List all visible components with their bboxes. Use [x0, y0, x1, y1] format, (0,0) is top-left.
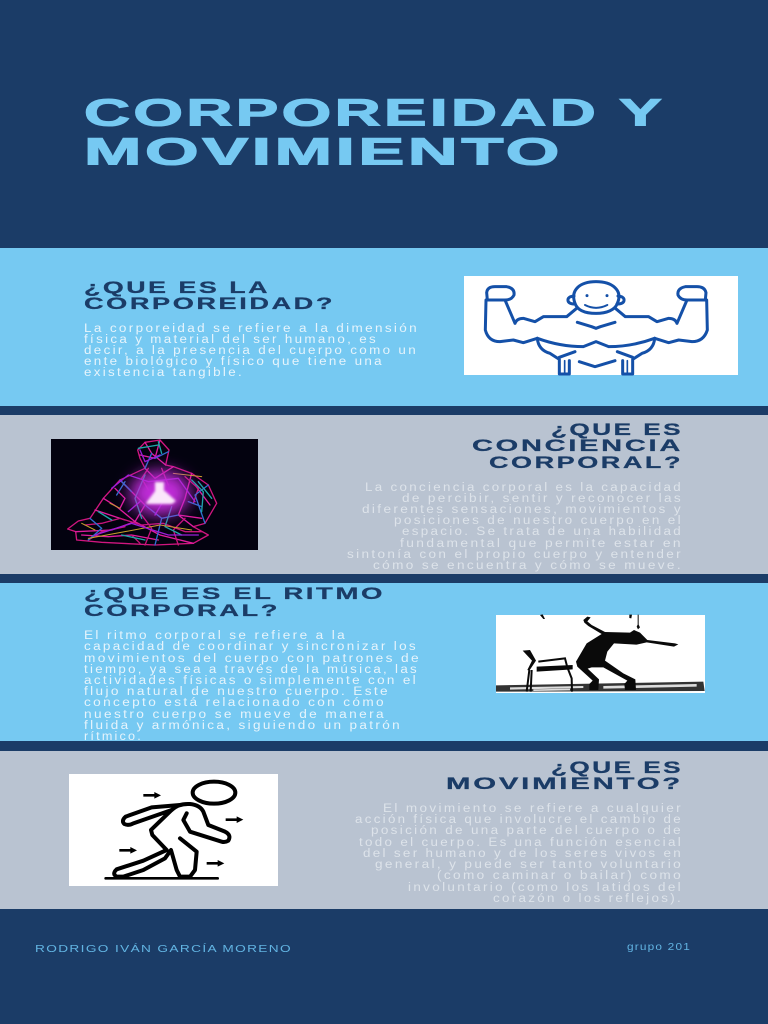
- text block: ritmo corporal: concepto está relacionado con cómo: [84, 697, 386, 709]
- text block: ritmo corporal: fluida y armónica, siguiendo un patrón: [84, 720, 402, 732]
- heading: movimiento: MOVIMIENTO?: [446, 774, 683, 793]
- text block: movimiento: general, y puede ser tanto voluntario: [375, 859, 683, 871]
- text block: movimiento: involuntario (como los latidos del: [408, 882, 683, 894]
- text block: corporeidad: [84, 323, 419, 379]
- text block: conciencia corporal: posiciones de nuestro cuerpo en el: [394, 515, 683, 527]
- text block: ritmo corporal: El ritmo corporal se refiere a la: [84, 630, 347, 642]
- text block: corporeidad: existencia tangible.: [84, 367, 244, 379]
- text block: conciencia corporal: sintonía con el propio cuerpo y entender: [347, 549, 683, 561]
- title: CORPOREIDAD Y: [84, 92, 665, 134]
- text block: ritmo corporal: capacidad de coordinar y sincronizar los: [84, 641, 418, 653]
- heading: ritmo corporal: CORPORAL?: [84, 601, 280, 620]
- heading: conciencia corporal: CORPORAL?: [489, 453, 683, 472]
- title: MOVIMIENTO: [84, 132, 563, 174]
- heading: ritmo corporal: [84, 584, 385, 620]
- title: [84, 92, 665, 174]
- text block: ritmo corporal: nuestro cuerpo se mueve de manera: [84, 709, 386, 721]
- image: meditating energy figure: [51, 439, 258, 550]
- icon: walking person with arrows: [69, 774, 278, 886]
- text block: corporeidad: La corporeidad se refiere a la dimensión: [84, 323, 419, 335]
- text block: movimiento: todo el cuerpo. Es una función esencial: [359, 837, 683, 849]
- text block: ritmo corporal: rítmico.: [84, 731, 143, 743]
- text block: ritmo corporal: tiempo, ya sea a través de la música, las: [84, 664, 419, 676]
- panel: que es el ritmo corporal: [0, 583, 768, 743]
- text block: movimiento: acción física que involucre el cambio de: [355, 814, 683, 826]
- footer: group: grupo 201: [627, 942, 691, 953]
- text block: conciencia corporal: [347, 482, 683, 572]
- text block: conciencia corporal: cómo se encuentra y cómo se mueve.: [373, 560, 683, 572]
- heading: corporeidad: CORPOREIDAD?: [84, 294, 335, 313]
- text block: movimiento: corazón o los reflejos).: [493, 893, 683, 905]
- image: dancer silhouette with chair: [496, 614, 705, 693]
- text block: conciencia corporal: La conciencia corporal es la capacidad: [365, 482, 683, 494]
- text block: conciencia corporal: fundamental que permite estar en: [400, 538, 683, 550]
- text block: ritmo corporal: actividades físicas o simplemente con el: [84, 675, 418, 687]
- text block: conciencia corporal: de percibir, sentir y reconocer las: [402, 493, 683, 505]
- panel: que es conciencia corporal: [0, 415, 768, 574]
- heading: conciencia corporal: CONCIENCIA: [472, 436, 683, 455]
- heading: ritmo corporal: ¿QUE ES EL RITMO: [84, 584, 385, 603]
- footer: author name: RODRIGO IVÁN GARCÍA MORENO: [35, 942, 292, 955]
- text block: movimiento: del ser humano y de los seres vivos en: [363, 848, 683, 860]
- heading: conciencia corporal: ¿QUE ES: [551, 420, 683, 439]
- heading: conciencia corporal: [472, 420, 683, 472]
- text block: movimiento: El movimiento se refiere a cualquier: [383, 803, 683, 815]
- text block: movimiento: (como caminar o bailar) como: [437, 870, 683, 882]
- panel: que es la corporeidad: [0, 248, 768, 406]
- heading: movimiento: ¿QUE ES: [551, 758, 683, 777]
- heading: movimiento: [446, 758, 683, 793]
- panel: que es movimiento: [0, 751, 768, 909]
- text block: conciencia corporal: diferentes sensaciones, movimientos y: [362, 504, 683, 516]
- text block: movimiento: [355, 803, 683, 905]
- text block: conciencia corporal: espacio. Se trata de una habilidad: [402, 526, 683, 538]
- text block: ritmo corporal: [84, 630, 421, 743]
- text block: corporeidad: física y material del ser humano, es: [84, 334, 378, 346]
- icon: muscular figure: [464, 276, 738, 375]
- text block: corporeidad: decir, a la presencia del cuerpo como un: [84, 345, 418, 357]
- heading: corporeidad: ¿QUE ES LA: [84, 278, 270, 297]
- text block: ritmo corporal: flujo natural de nuestro cuerpo. Este: [84, 686, 390, 698]
- heading: corporeidad: [84, 278, 335, 313]
- text block: movimiento: posición de una parte del cuerpo o de: [371, 825, 683, 837]
- text block: corporeidad: ente biológico y físico que tiene una: [84, 356, 384, 368]
- text block: ritmo corporal: movimientos del cuerpo con patrones de: [84, 653, 421, 665]
